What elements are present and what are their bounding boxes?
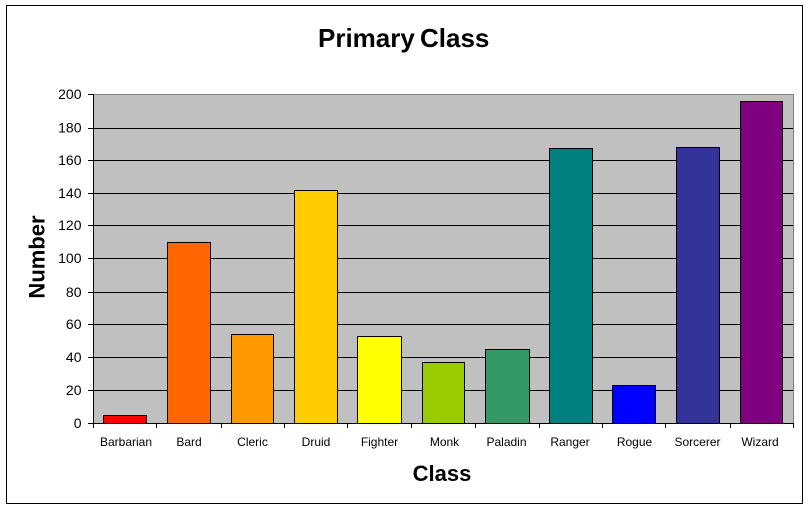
y axis labels <box>58 86 82 431</box>
y axis title: Number <box>24 215 50 299</box>
title: Class <box>420 23 489 53</box>
x axis labels: Bard <box>176 435 202 449</box>
y axis labels: 40 <box>66 349 82 365</box>
x axis labels: Cleric <box>237 435 268 449</box>
y axis labels: 140 <box>58 185 82 201</box>
y axis labels: 0 <box>74 415 82 431</box>
x axis title: Class <box>413 461 471 486</box>
axis ticks <box>88 94 794 428</box>
y axis labels: 20 <box>66 382 82 398</box>
y axis labels: 160 <box>58 152 82 168</box>
y axis labels: 120 <box>58 217 82 233</box>
y axis labels: 80 <box>66 284 82 300</box>
plot area <box>93 94 794 424</box>
y axis labels: 100 <box>58 250 82 266</box>
x axis labels: Paladin <box>486 435 527 449</box>
x axis labels: Druid <box>302 435 330 449</box>
title: Primary <box>318 23 415 53</box>
x axis labels: Rogue <box>617 435 652 449</box>
x axis labels: Barbarian <box>100 435 152 449</box>
x axis labels: Sorcerer <box>674 435 721 449</box>
y axis labels: 200 <box>58 86 82 102</box>
y axis labels: 60 <box>66 316 82 332</box>
x axis labels: Monk <box>430 435 460 449</box>
x axis labels: Wizard <box>741 435 779 449</box>
x axis labels: Ranger <box>550 435 590 449</box>
x axis labels <box>100 435 779 449</box>
bars <box>104 102 782 424</box>
x axis labels: Fighter <box>361 435 398 449</box>
y axis labels: 180 <box>58 120 82 136</box>
